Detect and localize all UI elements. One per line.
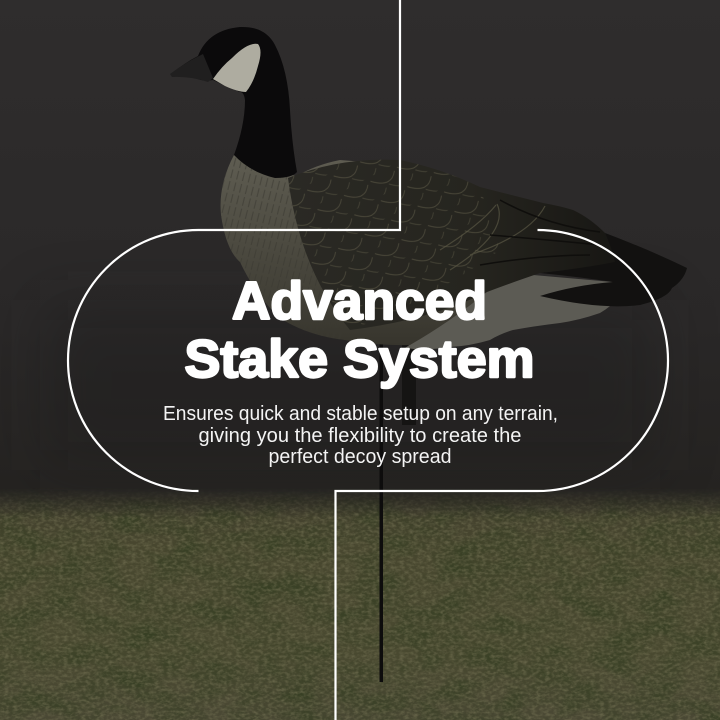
title: Stake System: [184, 330, 534, 389]
upper stem and left arc: [68, 0, 400, 491]
body and breast: [221, 155, 487, 345]
wing feathers: [288, 160, 620, 330]
grass field: [0, 488, 720, 720]
white underside: [405, 275, 620, 349]
neck and head: [171, 27, 297, 178]
goose decoy: [170, 27, 687, 682]
description text: giving you the flexibility to create the: [198, 425, 522, 447]
tail feathers: [540, 233, 687, 306]
bill: [170, 54, 213, 82]
description text: perfect decoy spread: [268, 446, 452, 468]
title: Advanced: [232, 272, 487, 331]
description text: [163, 403, 558, 468]
title: [184, 272, 534, 389]
white cheek patch: [213, 44, 260, 92]
stake and leg: [380, 340, 416, 682]
lower stem and right arc: [336, 230, 668, 720]
description text: Ensures quick and stable setup on any terrain,: [163, 403, 558, 425]
